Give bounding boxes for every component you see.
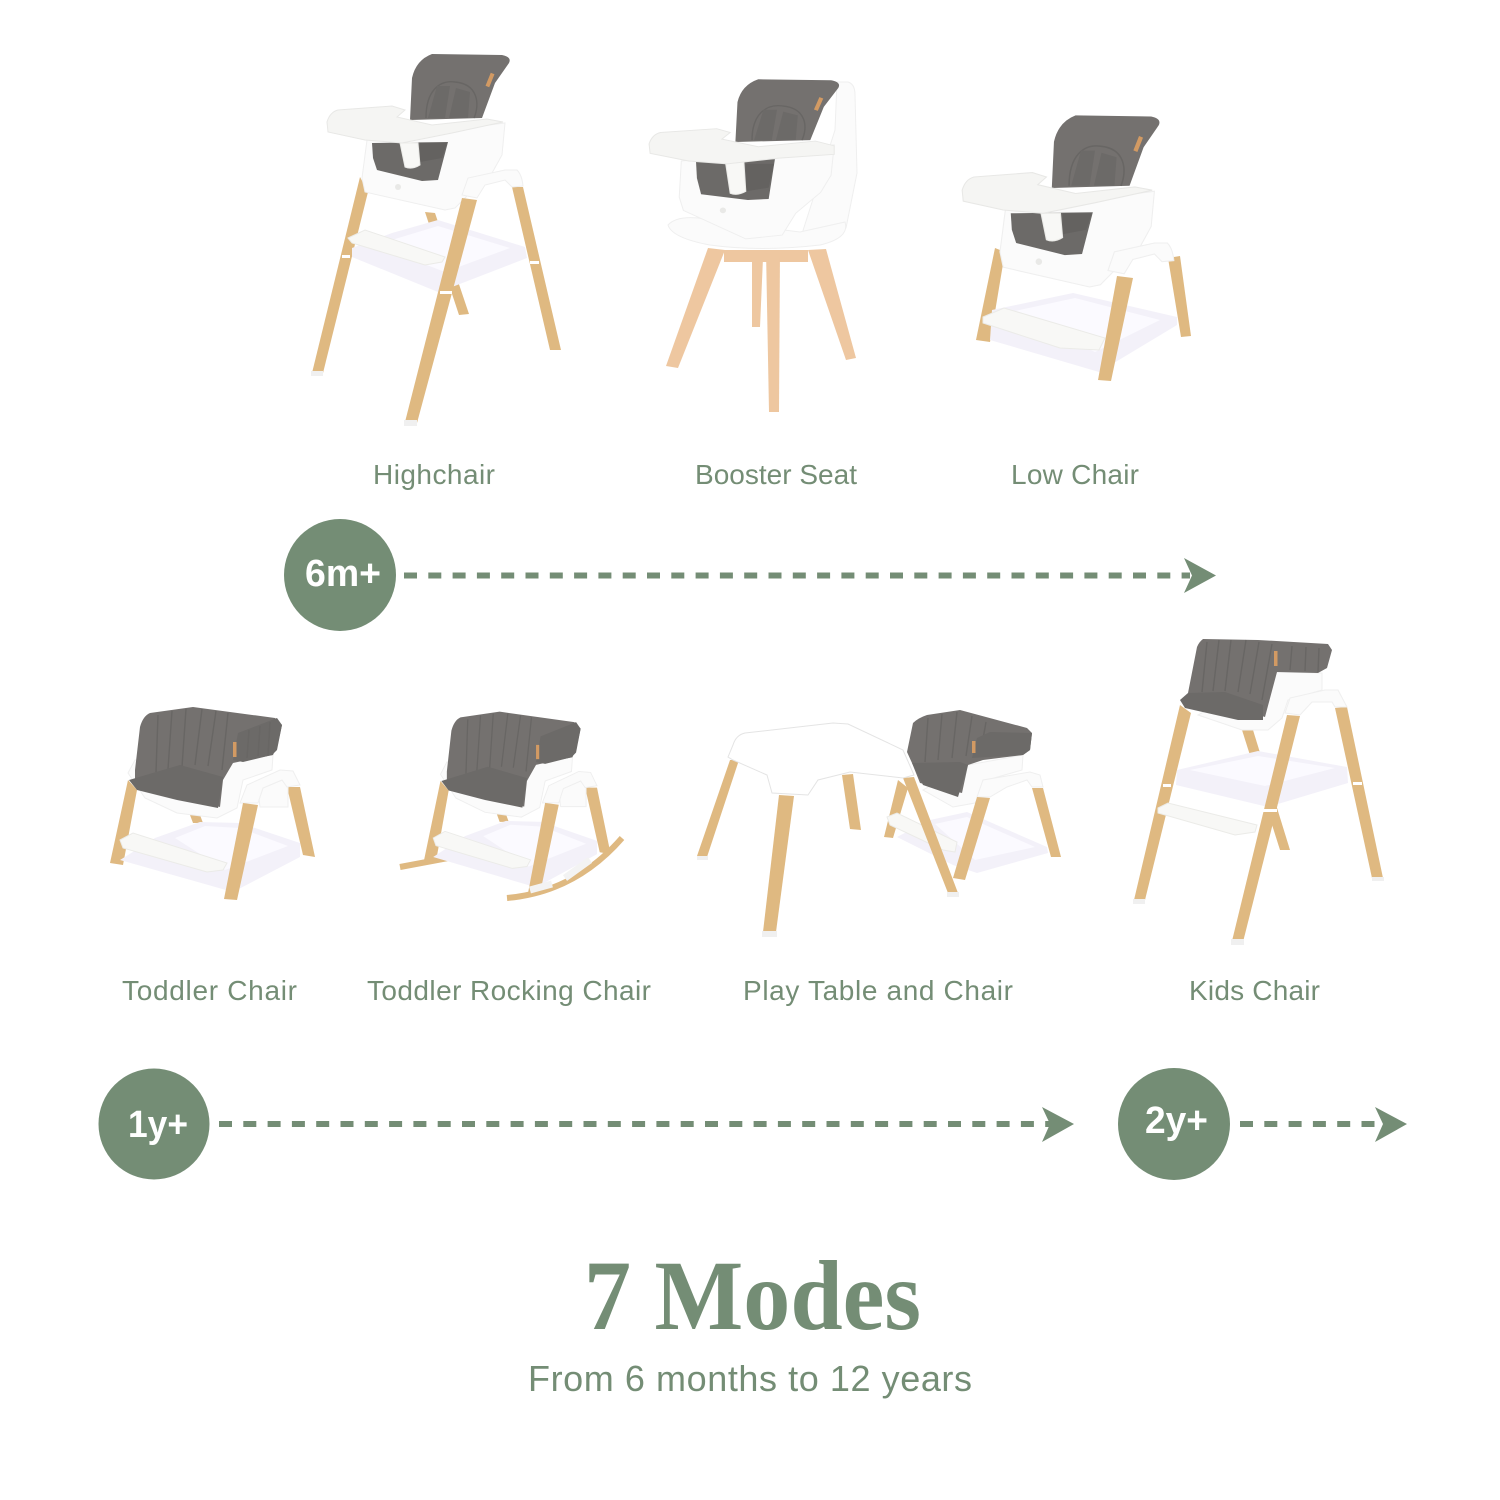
badge and arrow: 1y+ [98, 1068, 1074, 1180]
label: Low Chair: Low Chair [1011, 459, 1139, 490]
chair: low chair [962, 115, 1191, 381]
subtitle: From 6 months to 12 years [528, 1358, 972, 1399]
chair: highchair [311, 54, 561, 426]
badge and arrow: 1y+: 1y+ [128, 1104, 188, 1146]
chair: booster seat [649, 79, 857, 412]
chair: play table and chair [697, 710, 1061, 937]
title: 7 Modes [584, 1240, 921, 1351]
label: Toddler Chair: Toddler Chair [122, 975, 297, 1006]
badge and arrow: 6m+: 6m+ [305, 553, 381, 595]
chair: toddler rocking chair [400, 712, 622, 898]
badge and arrow: 2y+: 2y+ [1145, 1100, 1208, 1142]
label: Booster Seat: Booster Seat [695, 459, 857, 490]
chair: kids chair [1133, 639, 1384, 945]
label: Kids Chair: Kids Chair [1189, 975, 1320, 1006]
chair: toddler chair [110, 707, 315, 900]
label: Play Table and Chair: Play Table and Chair [743, 975, 1013, 1006]
badge and arrow: 2y+ [1118, 1068, 1407, 1180]
label: Highchair: Highchair [373, 459, 495, 490]
label: Toddler Rocking Chair: Toddler Rocking Chair [367, 975, 651, 1006]
badge and arrow: 6m+ [284, 519, 1216, 631]
